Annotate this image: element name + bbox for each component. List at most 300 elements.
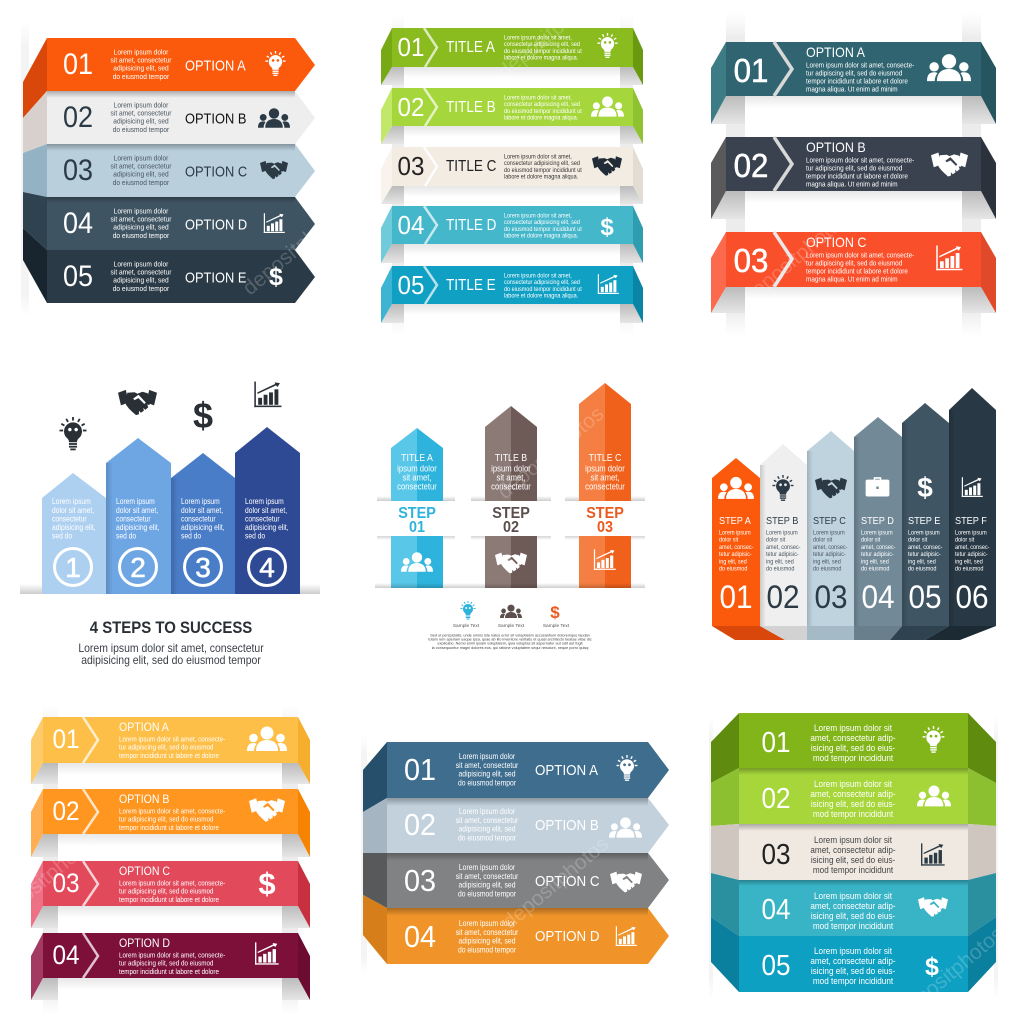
step B arrow: Lorem ipsum [766, 530, 798, 537]
step 3 arrow [171, 453, 235, 594]
ribbon title C: consectetur adipisicing elit, sed [504, 161, 580, 167]
step 2 arrow: consectetur [116, 514, 151, 524]
band 05: isicing elit, sed do eius- [811, 965, 895, 976]
option D row: OPTION D [185, 217, 247, 233]
step C arrow: tetur adipisic- [813, 552, 846, 558]
step 01 arrow: sit amet, [402, 473, 432, 483]
option D row: OPTION D [535, 928, 600, 945]
step C arrow [807, 431, 854, 626]
option D row: adipisicing elit, sed [459, 936, 515, 946]
option A row: 01 [404, 753, 436, 787]
panel: four option arrows, blue to orange [361, 735, 669, 975]
watermarks: depositphotos [493, 402, 608, 504]
step C arrow: Lorem ipsum [813, 530, 845, 537]
option A row: OPTION A [185, 58, 246, 74]
subheading: adipisicing elit, sed do eiusmod tempor [81, 655, 261, 667]
step A arrow: tetur adipisic- [719, 552, 752, 558]
ribbon option B: tur adipiscing elit, sed do eiusmod [119, 816, 214, 824]
step 01 arrow [391, 428, 443, 588]
step 01 arrow: consectetur [397, 482, 437, 492]
step 02 arrow: 02 [503, 518, 519, 536]
option E row: Lorem ipsum dolor [114, 260, 169, 269]
icons above the steps [60, 382, 281, 450]
option A row: 01 [63, 48, 93, 81]
step 03 arrow: consectetur [585, 482, 625, 492]
ribbon title D: Lorem ipsum dolor sit amet, [504, 213, 572, 220]
step 03 arrow: 03 [597, 518, 613, 536]
option A row: Lorem ipsum dolor [459, 751, 516, 761]
ribbon option B: 02 [734, 147, 768, 184]
ribbon option A: Lorem ipsum dolor sit amet, consecte- [119, 736, 225, 744]
band 01: amet, consectetur adip- [810, 732, 896, 743]
option C row: do eiusmod tempor [113, 179, 170, 187]
step E arrow: Lorem ipsum [908, 530, 940, 537]
option D row: 04 [404, 920, 436, 954]
ribbon title D: TITLE D [446, 217, 496, 234]
band 05 [711, 917, 996, 992]
step 1 arrow: consectetur [52, 514, 87, 524]
step 03 arrow [579, 383, 631, 588]
step F arrow: do eiusmod [955, 566, 983, 573]
step 4 arrow: Lorem ipsum [245, 496, 284, 506]
step B arrow: tetur adipisic- [766, 552, 799, 558]
step 3 arrow: sed do [181, 531, 201, 541]
step F arrow: dolor sit [955, 537, 975, 544]
step C arrow: do eiusmod [813, 566, 841, 573]
panel: five title ribbons, green to blue [381, 15, 643, 335]
step 2 arrow: dolor sit amet, [116, 505, 158, 515]
option E row: adipisicing elit, sed [113, 276, 169, 285]
step F arrow: ing elit, sed [955, 559, 983, 566]
ribbon option A: 01 [734, 52, 768, 89]
option B row [363, 798, 669, 853]
step A arrow: do eiusmod [719, 566, 747, 573]
option B row: sit amet, consectetur [111, 109, 172, 118]
ribbon title B: TITLE B [446, 99, 496, 116]
subheading: Lorem ipsum dolor sit amet, consectetur [78, 643, 264, 655]
ribbon option D: OPTION D [119, 937, 170, 950]
legend icons with labels: Sample Text [453, 623, 480, 629]
step D arrow [854, 417, 902, 626]
ribbon option C: tur adipiscing elit, sed do eiusmod [119, 888, 214, 896]
step C arrow: ing elit, sed [813, 559, 841, 566]
panel: 4 steps to success [20, 382, 320, 667]
step 3 arrow: Lorem ipsum [181, 496, 220, 506]
step B arrow: dolor sit [766, 537, 786, 544]
band 03: isicing elit, sed do eius- [811, 854, 895, 865]
ribbon title A: Lorem ipsum dolor sit amet, [504, 35, 572, 42]
step F arrow: amet, consec- [955, 545, 989, 551]
step 02 arrow: TITLE B [495, 451, 527, 463]
ribbon option A: OPTION A [806, 44, 865, 60]
step 02 arrow [485, 406, 537, 588]
icons above the steps: $ [193, 395, 213, 436]
step 1 arrow: adipisicing elit, [52, 522, 96, 532]
legend icons with labels: Sample Text [543, 623, 570, 629]
step B arrow [760, 444, 807, 626]
band 02: mod tempor incididunt [813, 808, 894, 819]
option D row [363, 895, 669, 964]
band 05: Lorem ipsum dolor sit [814, 945, 892, 956]
band 01: mod tempor incididunt [813, 752, 894, 763]
band 03: mod tempor incididunt [813, 864, 894, 875]
step 1 arrow: Lorem ipsum [52, 496, 91, 506]
step 02 arrow: STEP [492, 504, 530, 522]
step F arrow [949, 388, 996, 626]
heading: 4 STEPS TO SUCCESS [90, 619, 253, 637]
step A arrow: STEP A [719, 516, 751, 527]
watermarks: depositphotos [498, 832, 613, 934]
small footer paragraph: Sed ut perspiciatis, unde omnis iste natus error sit voluptatem accusantium doloremque laudan [430, 634, 590, 638]
step A arrow: dolor sit [719, 537, 739, 544]
band 02: 02 [761, 782, 791, 814]
band 04: isicing elit, sed do eius- [811, 910, 895, 921]
step D arrow: 04 [861, 579, 895, 615]
step F arrow: 06 [955, 579, 989, 615]
step 4 arrow: dolor sit amet, [245, 505, 287, 515]
ribbon title C: labore et dolore magna aliqua. [504, 174, 578, 181]
step A arrow [712, 458, 760, 626]
ribbon option D: Lorem ipsum dolor sit amet, consecte- [119, 952, 225, 960]
step 2 arrow: adipisicing elit, [116, 522, 160, 532]
ribbon option A: tur adipiscing elit, sed do eiusmod [806, 70, 902, 78]
step C arrow: dolor sit [813, 537, 833, 544]
option B row: Lorem ipsum dolor [459, 806, 516, 816]
ribbon title D [381, 206, 643, 263]
step 01 arrow: STEP [398, 504, 436, 522]
option B row: adipisicing elit, sed [113, 117, 169, 126]
step D arrow: do eiusmod [861, 566, 889, 573]
option B row: 02 [404, 808, 436, 842]
ribbon option C: $ [258, 866, 276, 901]
option B row: Lorem ipsum dolor [114, 101, 169, 110]
option A row: sit amet, consectetur [111, 56, 172, 65]
step E arrow: dolor sit [908, 537, 928, 544]
ribbon option C: OPTION C [119, 865, 170, 878]
band 05: 05 [761, 949, 791, 981]
small footer paragraph [428, 634, 592, 650]
step 4 arrow: 4 [259, 552, 275, 583]
ribbon title E: Lorem ipsum dolor sit amet, [504, 273, 572, 280]
option C row: Lorem ipsum dolor [114, 154, 169, 163]
step 02 arrow: consectetur [491, 482, 531, 492]
step 01 arrow: 01 [409, 518, 426, 536]
ribbon title C: do eiusmod tempor incididunt ut [504, 168, 582, 174]
step E arrow: ing elit, sed [908, 559, 936, 566]
ribbon option B [711, 137, 996, 219]
ribbon title A: consectetur adipisicing elit, sed [504, 42, 580, 48]
band 03: 03 [761, 838, 791, 870]
option A row [363, 742, 669, 812]
option C row [23, 144, 315, 197]
option C row: sit amet, consectetur [456, 871, 519, 881]
option E row: 05 [63, 260, 93, 293]
option A row: Lorem ipsum dolor [114, 48, 169, 57]
ribbon title B: consectetur adipisicing elit, sed [504, 102, 580, 108]
band 02: isicing elit, sed do eius- [811, 798, 895, 809]
option E row: sit amet, consectetur [111, 268, 172, 277]
ribbon title C: Lorem ipsum dolor sit amet, [504, 154, 572, 161]
ribbon title B: 02 [398, 93, 424, 122]
ribbon option C: tempor incididunt ut labore et dolore [119, 897, 219, 904]
option A row: adipisicing elit, sed [459, 769, 515, 779]
ribbon option C: tur adipiscing elit, sed do eiusmod [806, 260, 902, 268]
step A arrow: 01 [719, 579, 753, 615]
option E row: do eiusmod tempor [113, 285, 170, 293]
option C row [363, 853, 669, 908]
step 03 arrow: STEP [586, 504, 624, 522]
option C row: OPTION C [535, 873, 600, 890]
small footer paragraph: explicabo. Nemo enim ipsam voluptatem, quia voluptas sit aspernatur aut odit aut fugit [438, 642, 583, 646]
option C row: 03 [63, 154, 93, 187]
panel: four option ribbons, yellow to maroon [31, 705, 310, 1015]
option D row [23, 192, 315, 250]
option C row: adipisicing elit, sed [459, 880, 515, 890]
ribbon title A [381, 28, 643, 85]
panel: six rising step arrows [712, 388, 996, 640]
option D row: do eiusmod tempor [113, 232, 170, 240]
ribbon option D [31, 933, 310, 1000]
option D row: do eiusmod tempor [458, 945, 517, 955]
step E arrow: $ [917, 472, 933, 503]
step 4 arrow: consectetur [245, 514, 280, 524]
ribbon option D: tur adipiscing elit, sed do eiusmod [119, 960, 214, 968]
ribbon title B: do eiusmod tempor incididunt ut [504, 109, 582, 115]
ribbon option A: magna aliqua. Ut enim ad minim [806, 86, 898, 94]
step B arrow: ing elit, sed [766, 559, 794, 566]
option A row: OPTION A [535, 762, 599, 779]
legend icons with labels [453, 601, 570, 629]
ribbon option A: Lorem ipsum dolor sit amet, consecte- [806, 62, 914, 70]
step 3 arrow: 3 [195, 552, 211, 583]
step 01 arrow: ipsum dolor [397, 464, 437, 474]
ribbon option B: 02 [52, 797, 80, 826]
step 2 arrow: sed do [116, 531, 136, 541]
step 03 arrow: ipsum dolor [585, 464, 625, 474]
ribbon option A: OPTION A [119, 721, 169, 734]
ribbon option A: tempor incididunt ut labore et dolore [806, 78, 908, 86]
step 2 arrow: 2 [130, 552, 146, 583]
option D row: sit amet, consectetur [456, 927, 519, 937]
band 04: amet, consectetur adip- [810, 900, 896, 911]
step C arrow: amet, consec- [813, 545, 847, 551]
step 02 arrow: ipsum dolor [491, 464, 531, 474]
legend icons with labels: $ [550, 603, 560, 622]
ribbon option A: tempor incididunt ut labore et dolore [119, 753, 219, 760]
band 05: amet, consectetur adip- [810, 955, 896, 966]
ribbon option B: Lorem ipsum dolor sit amet, consecte- [806, 157, 914, 165]
ribbon option C [31, 861, 310, 928]
step E arrow: do eiusmod [908, 566, 936, 573]
ribbon option C: magna aliqua. Ut enim ad minim [806, 276, 898, 284]
ribbon option D: 04 [52, 941, 80, 970]
step 1 arrow [42, 473, 106, 594]
option E row [23, 228, 315, 303]
step B arrow: amet, consec- [766, 545, 800, 551]
ribbon option B: OPTION B [806, 139, 866, 155]
ribbon title D: 04 [398, 211, 424, 240]
option B row: OPTION B [185, 111, 246, 127]
ribbon option B [31, 789, 310, 857]
ribbon title D: consectetur adipisicing elit, sed [504, 220, 580, 226]
ribbon option A: 01 [52, 725, 80, 754]
step B arrow: do eiusmod [766, 566, 794, 573]
step E arrow: amet, consec- [908, 545, 942, 551]
step E arrow: 05 [908, 579, 942, 615]
band 05: $ [925, 953, 939, 981]
option B row: do eiusmod tempor [113, 126, 170, 134]
step A arrow: ing elit, sed [719, 559, 747, 566]
ribbon option B: magna aliqua. Ut enim ad minim [806, 181, 898, 189]
option C row: Lorem ipsum dolor [459, 862, 516, 872]
ribbon title D: do eiusmod tempor incididunt ut [504, 227, 582, 233]
option B row: sit amet, consectetur [456, 815, 519, 825]
ribbon title C: TITLE C [446, 158, 496, 175]
step 1 arrow: dolor sit amet, [52, 505, 94, 515]
band 02: amet, consectetur adip- [810, 788, 896, 799]
option A row: do eiusmod tempor [458, 778, 517, 788]
option C row: sit amet, consectetur [111, 162, 172, 171]
ribbon title E: consectetur adipisicing elit, sed [504, 280, 580, 286]
option D row: Lorem ipsum dolor [459, 918, 516, 928]
ribbon title A: TITLE A [446, 39, 495, 56]
ribbon option C: tempor incididunt ut labore et dolore [806, 268, 908, 276]
option C row: 03 [404, 864, 436, 898]
step D arrow: dolor sit [861, 537, 881, 544]
ribbon option A [31, 717, 310, 784]
step E arrow: tetur adipisic- [908, 552, 941, 558]
ribbon option C: 03 [52, 869, 80, 898]
step 3 arrow: consectetur [181, 514, 216, 524]
option C row: do eiusmod tempor [458, 889, 517, 899]
band 01: isicing elit, sed do eius- [811, 742, 895, 753]
step C arrow: STEP C [813, 516, 846, 527]
step D arrow: STEP D [861, 516, 894, 527]
ribbon title A: do eiusmod tempor incididunt ut [504, 49, 582, 55]
option D row: Lorem ipsum dolor [114, 207, 169, 216]
panel: five option arrows, orange to dark [21, 22, 315, 318]
band 02 [711, 768, 996, 826]
band 01: 01 [761, 726, 791, 758]
ribbon option B: Lorem ipsum dolor sit amet, consecte- [119, 808, 225, 816]
step D arrow: amet, consec- [861, 545, 895, 551]
ribbon title B: Lorem ipsum dolor sit amet, [504, 95, 572, 102]
band 05: mod tempor incididunt [813, 975, 894, 986]
step A arrow: Lorem ipsum [719, 530, 751, 537]
band 04: Lorem ipsum dolor sit [814, 890, 892, 901]
ribbon title B: labore et dolore magna aliqua. [504, 115, 578, 122]
band 03: amet, consectetur adip- [810, 844, 896, 855]
band 04 [711, 873, 996, 936]
panel: three step arrows [375, 383, 645, 650]
ribbon option B: tempor incididunt ut labore et dolore [119, 825, 219, 832]
ribbon option A: tur adipiscing elit, sed do eiusmod [119, 744, 214, 752]
step F arrow: tetur adipisic- [955, 552, 988, 558]
ribbon option C [711, 232, 996, 313]
option D row: 04 [63, 207, 93, 240]
option A row: sit amet, consectetur [456, 760, 519, 770]
ribbon option B: OPTION B [119, 793, 169, 806]
watermarks: depositphotos [238, 198, 353, 300]
watermarks: depositphotos [738, 207, 853, 309]
ribbon option C: Lorem ipsum dolor sit amet, consecte- [806, 252, 914, 260]
ribbon title A: labore et dolore magna aliqua. [504, 55, 578, 62]
band 02: Lorem ipsum dolor sit [814, 778, 892, 789]
subheading [78, 643, 264, 667]
ribbon title D: $ [600, 214, 614, 241]
small footer paragraph: la consequuntur magni dolores eos, qui ratione voluptatem sequi nesciunt, neque porro quisq [432, 646, 588, 650]
step 3 arrow: adipisicing elit, [181, 522, 225, 532]
step E arrow [902, 403, 949, 626]
ribbon option A [711, 42, 996, 124]
step 03 arrow: TITLE C [589, 451, 622, 463]
ribbon option C: Lorem ipsum dolor sit amet, consecte- [119, 880, 225, 888]
ribbon option B: tur adipiscing elit, sed do eiusmod [806, 165, 902, 173]
step F arrow: STEP F [955, 516, 987, 527]
option D row: sit amet, consectetur [111, 215, 172, 224]
ribbon option B: tempor incididunt ut labore et dolore [806, 173, 908, 181]
step 1 arrow: sed do [52, 531, 72, 541]
option B row: adipisicing elit, sed [459, 824, 515, 834]
step 4 arrow: sed do [245, 531, 265, 541]
step E arrow: STEP E [908, 516, 941, 527]
band 04: mod tempor incididunt [813, 920, 894, 931]
band 04: 04 [761, 893, 791, 925]
legend icons with labels: Sample Text [498, 623, 525, 629]
step D arrow: Lorem ipsum [861, 530, 893, 537]
option B row: OPTION B [535, 817, 599, 834]
ribbon option D: tempor incididunt ut labore et dolore [119, 969, 219, 976]
option C row: adipisicing elit, sed [113, 170, 169, 179]
watermarks: depositphotos [893, 922, 1008, 1024]
small footer paragraph: totam rem aperiam eaque ipsa, quae ab illo inventore veritatis et quasi architecto beatae vitae dic [428, 638, 592, 642]
option C row: OPTION C [185, 164, 247, 180]
step 2 arrow [106, 438, 171, 594]
step 01 arrow: TITLE A [401, 451, 434, 463]
step F arrow: Lorem ipsum [955, 530, 987, 537]
ribbon title C: 03 [398, 152, 424, 181]
option B row [23, 91, 315, 153]
option B row: do eiusmod tempor [458, 833, 517, 843]
ribbon title E [381, 266, 643, 323]
option E row: OPTION E [185, 270, 246, 286]
ribbon option C: 03 [734, 242, 768, 279]
option A row: do eiusmod tempor [113, 73, 170, 81]
step 1 arrow: 1 [65, 552, 81, 583]
step B arrow: STEP B [766, 516, 799, 527]
ribbon title E: 05 [398, 271, 424, 300]
ribbon title B [381, 88, 643, 144]
option A row [23, 38, 315, 118]
step D arrow: ing elit, sed [861, 559, 889, 566]
band 01: Lorem ipsum dolor sit [814, 722, 892, 733]
ribbon option C: OPTION C [806, 234, 867, 250]
ribbon title D: labore et dolore magna aliqua. [504, 233, 578, 240]
step A arrow: amet, consec- [719, 545, 753, 551]
step 3 arrow: dolor sit amet, [181, 505, 223, 515]
option E row: $ [269, 263, 283, 291]
panel: five stacked bands, green to blue [709, 713, 998, 1000]
step D arrow: tetur adipisic- [861, 552, 894, 558]
step 03 arrow: sit amet, [590, 473, 620, 483]
step 2 arrow: Lorem ipsum [116, 496, 155, 506]
ribbon title C [381, 147, 643, 204]
ribbon title E: TITLE E [446, 277, 496, 294]
step 4 arrow: adipisicing elit, [245, 522, 289, 532]
band 01 [711, 713, 996, 783]
folded base of the arrows [712, 626, 996, 640]
ribbon title A: 01 [398, 33, 424, 62]
